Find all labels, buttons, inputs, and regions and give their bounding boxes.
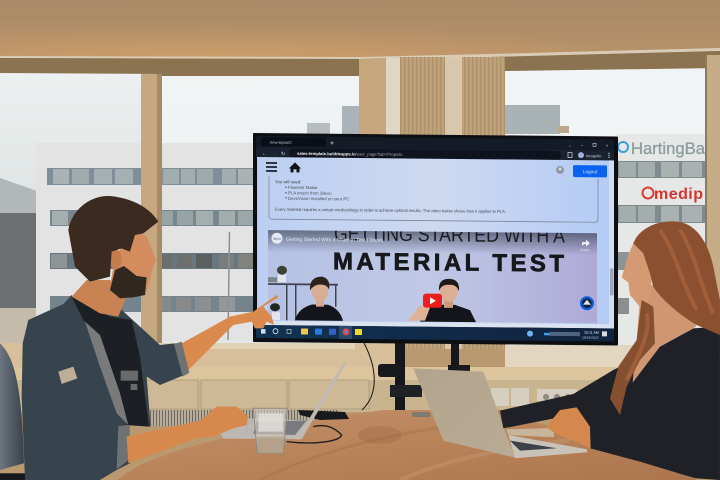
background rooftop buildings [307, 105, 569, 134]
browser tab bar [256, 136, 614, 151]
face [110, 230, 156, 298]
browser address bar: Incognito [586, 154, 601, 158]
table [118, 410, 697, 480]
sign: medip: medip [654, 186, 703, 203]
video player [268, 223, 597, 323]
requirements card [269, 176, 598, 222]
window sill and wall [0, 343, 720, 412]
office chair [0, 343, 25, 480]
cuffs [117, 342, 189, 469]
browser address bar [256, 147, 614, 161]
window views [0, 68, 706, 350]
main hair [633, 221, 720, 335]
browser tab bar: ⌄ [568, 143, 571, 148]
logout button: Logout [583, 169, 598, 175]
scroll to top button [580, 296, 594, 310]
requirements card: Every material requires a certain methodology in order to achieve optimal results. The video below shows how it applies to PLA. [275, 207, 506, 214]
left laptop [220, 363, 347, 443]
woman at laptop [500, 221, 720, 480]
right building with signs [617, 134, 706, 346]
remote control [298, 410, 349, 420]
ear [110, 249, 122, 269]
hair [68, 196, 158, 282]
presenter two [408, 278, 476, 322]
neck and chest skin [633, 283, 696, 383]
hoodie [22, 295, 188, 480]
hamburger menu icon [266, 162, 277, 172]
windows taskbar: 10:11 AM [584, 331, 599, 335]
browser address bar: ← [262, 151, 267, 157]
hand [546, 407, 591, 448]
browser address bar: → [272, 151, 277, 157]
browser tab bar: – [581, 143, 584, 148]
browser address bar: sales-template.bubbleapps.io/user_page?tab=Projects [297, 151, 402, 157]
headline: material test: MATERIAL TEST [333, 248, 564, 277]
monitor [253, 133, 618, 345]
forearm and hand on laptop [127, 407, 248, 463]
windows taskbar [256, 325, 614, 341]
presenter one [295, 276, 343, 321]
shelf with plants [268, 266, 338, 321]
sign: HartingBa: HartingBa [631, 139, 706, 158]
drinking glass [247, 408, 287, 453]
requirements card: You will need: [275, 179, 301, 184]
scrollbar [257, 157, 614, 328]
requirements card: Filament Maker [288, 185, 318, 190]
hair highlights [627, 230, 713, 380]
home icon [289, 162, 301, 172]
monitor stand and cable [362, 343, 470, 411]
logout button [573, 165, 607, 177]
face [622, 243, 653, 306]
shirt print [121, 371, 138, 390]
browser address bar: ↻ [281, 151, 285, 157]
ceiling [0, 0, 720, 60]
woman's laptop [413, 368, 587, 458]
man pointing at screen [22, 196, 278, 480]
curtain [359, 57, 505, 349]
pointing arm [182, 295, 278, 370]
video title bar [272, 233, 383, 245]
bezel [253, 133, 618, 345]
wall sockets [491, 388, 577, 406]
requirements card: DevoVision installed on your PC [288, 196, 349, 201]
browser tab bar: + [330, 140, 334, 147]
requirements card: PLA pouch from 3devo [288, 190, 332, 196]
hoodie lining [85, 322, 128, 425]
browser tab bar: × [606, 143, 609, 148]
front hair lock [610, 300, 655, 415]
share control [580, 240, 590, 252]
web page background [257, 157, 614, 328]
user avatar icon [556, 166, 564, 174]
headline: getting started: GETTING STARTED WITH A [334, 223, 566, 247]
radiator [148, 410, 338, 426]
share control: Share [580, 248, 590, 252]
neck [72, 280, 127, 317]
white office building [36, 143, 257, 341]
browser tab bar: new-layout2 [270, 140, 292, 145]
window frames and beam [0, 51, 720, 355]
marker on table [412, 412, 430, 417]
grey building, left [0, 178, 44, 344]
t-shirt [72, 297, 149, 427]
play button [423, 294, 442, 308]
video title bar: Getting Started With a Material Test | 3devo [286, 237, 383, 244]
beard [110, 266, 147, 298]
camera patch [58, 367, 77, 384]
windows taskbar: 10/19/2023 [582, 336, 599, 340]
sweater [500, 327, 720, 480]
notebook [506, 420, 623, 437]
video title bar: 3devo [273, 237, 281, 241]
